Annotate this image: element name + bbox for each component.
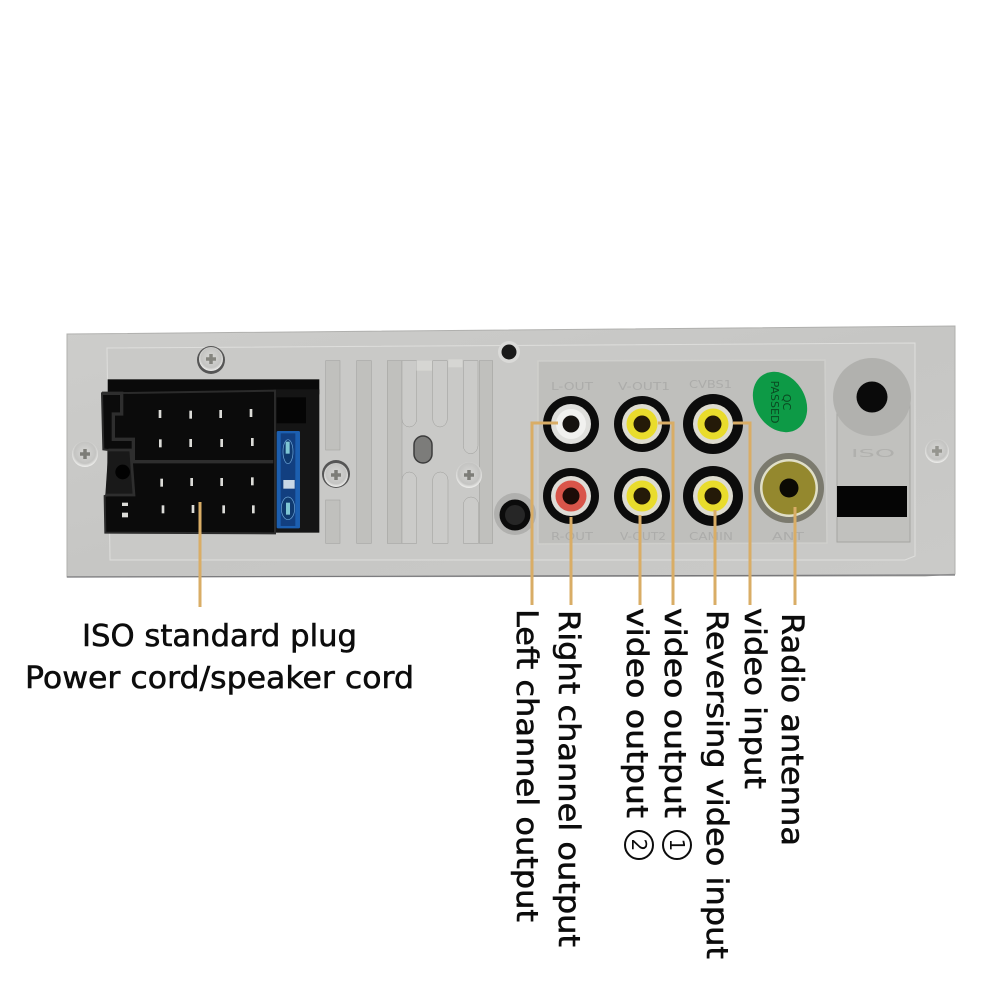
RCA: left output white: [543, 396, 599, 452]
port labels: [551, 378, 896, 543]
radio antenna socket: [754, 453, 824, 523]
mounting slot: [414, 436, 432, 463]
panel: rear metal plate: [67, 326, 955, 577]
black slot: [837, 486, 907, 517]
screws: [72, 341, 949, 488]
QC passed sticker: [742, 362, 818, 442]
ISO connector block: [102, 379, 319, 533]
RCA: video output 2 yellow: [614, 468, 670, 524]
port labels: V-OUT1: [618, 380, 670, 393]
port labels: ANT: [772, 530, 804, 543]
blue fuse: [277, 431, 300, 528]
label: left channel output: Left channel output: [510, 609, 544, 922]
port labels: L-OUT: [551, 380, 593, 393]
label: radio antenna: Radio antenna: [774, 613, 809, 846]
RCA: reversing input yellow: [683, 466, 743, 526]
RCA: right output red: [543, 468, 599, 524]
jack socket: [494, 493, 536, 535]
label: right channel output: Right channel output: [552, 610, 586, 947]
label: ISO standard plug: Power cord/speaker cord: [25, 661, 414, 696]
port labels: ISO: [851, 447, 896, 460]
panel: RCA recess: [538, 358, 911, 544]
label: video output 2: video output: [620, 608, 654, 818]
side round socket: [833, 358, 911, 436]
port labels: CVBS1: [689, 378, 732, 391]
port labels: V-OUT2: [620, 530, 666, 543]
port labels: R-OUT: [551, 530, 593, 543]
QC passed sticker: QC: [780, 394, 793, 410]
label: video output 1: 1: [665, 838, 689, 851]
RCA: video output 1 yellow: [614, 396, 670, 452]
leader lines: [200, 423, 795, 607]
label: ISO standard plug: ISO standard plug: [82, 619, 357, 654]
label: video output 1: video output: [658, 608, 692, 818]
port labels: CAMIN: [689, 530, 733, 543]
label: video output 2: 2: [627, 838, 651, 851]
RCA: video input yellow: [683, 394, 743, 454]
heat-sink fins: [326, 359, 493, 543]
label: reversing video input: Reversing video input: [700, 610, 734, 959]
QC passed sticker: PASSED: [768, 381, 781, 423]
label: ISO standard plug: [25, 619, 414, 696]
label: video input: video input: [738, 608, 772, 789]
